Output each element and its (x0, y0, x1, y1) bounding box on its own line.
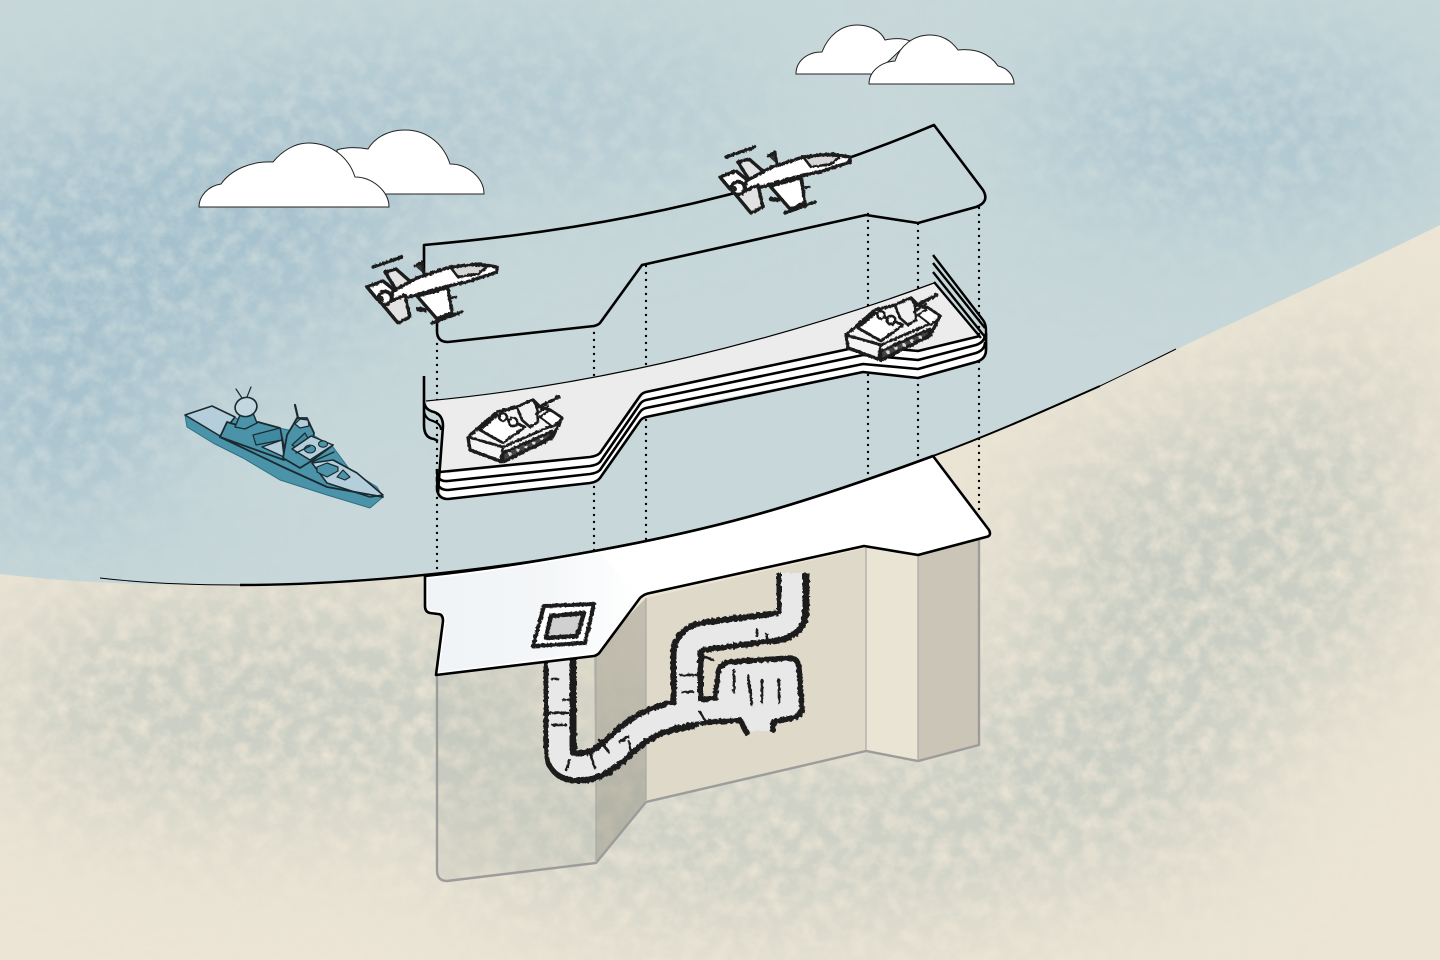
left edge lines (424, 376, 438, 441)
icon: warship (185, 387, 383, 508)
underground walls (437, 540, 979, 881)
ship: hull (185, 406, 383, 508)
tunnel: room (700, 658, 802, 731)
tunnel: ticks (549, 630, 779, 770)
cloud: right pair (796, 25, 1014, 84)
tunnel network (549, 573, 802, 770)
top layer surface (426, 283, 981, 473)
icon: fighter jet left (367, 257, 497, 323)
icon: fighter jet right (720, 147, 850, 213)
wall: right facet (918, 540, 979, 760)
lowest layer line (437, 333, 986, 499)
wall: diagonal facet (594, 598, 646, 863)
ship: superstructure (220, 422, 285, 460)
cloud: left pair (199, 130, 484, 207)
air domain layer outline (424, 125, 985, 342)
wall: left facet (437, 652, 596, 881)
dotted vertical guide lines (437, 208, 979, 575)
ship: stern deck (185, 406, 235, 436)
second layer line (437, 334, 985, 481)
wall outline (437, 540, 979, 881)
tunnel: main run (559, 573, 793, 767)
right edge lines (933, 255, 986, 350)
icon: tank right (846, 293, 940, 360)
slab shading (428, 553, 640, 672)
background: sky (0, 0, 1440, 585)
land domain layered slab (424, 255, 986, 499)
ship: fore deck (292, 436, 333, 460)
ground surface slab (425, 456, 990, 675)
white body of lower layers (440, 335, 986, 498)
wall: middle facet (866, 548, 918, 760)
ship: bridge tower (283, 418, 333, 468)
hatch entrance (533, 604, 594, 646)
icon: tank left (468, 395, 562, 462)
third layer line (437, 342, 985, 490)
ship: radar mast (235, 413, 257, 429)
horizon line (100, 349, 1176, 585)
wall: main facet (646, 548, 866, 802)
tunnel: room outline (700, 658, 802, 735)
